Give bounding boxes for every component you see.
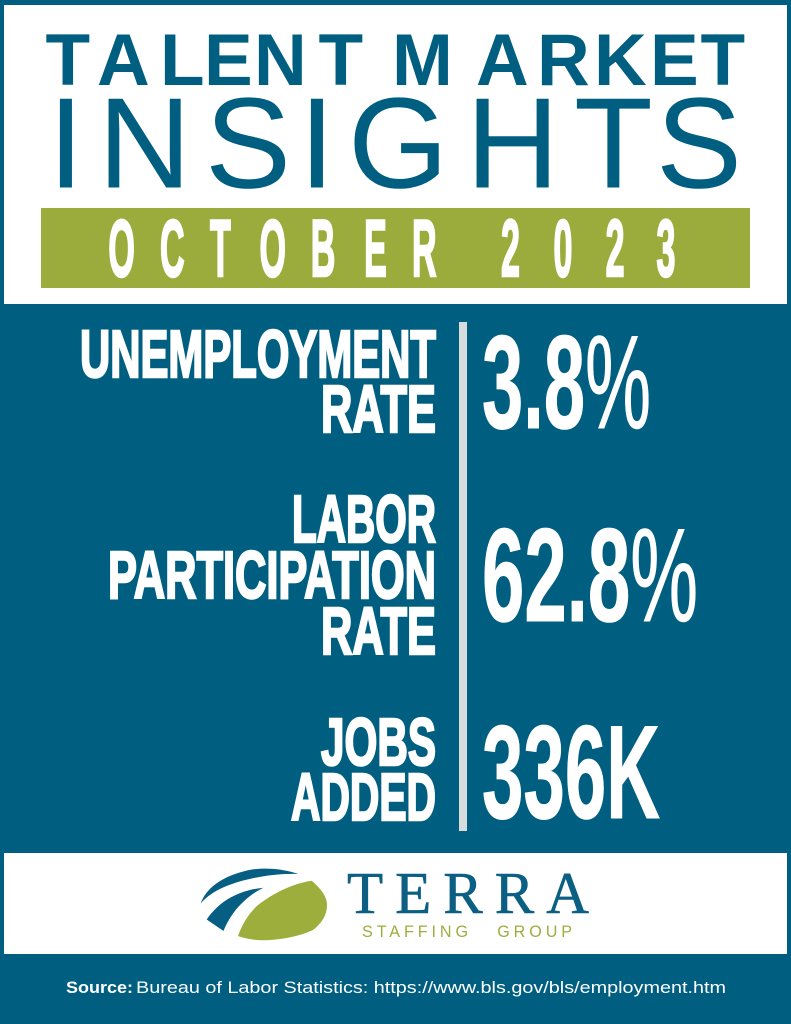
company tagline: STAFFING GROUP	[362, 923, 576, 941]
title line two: INSIGHTS	[48, 72, 742, 216]
label	[80, 317, 436, 447]
source line: Source:	[66, 978, 133, 997]
stat: labor participation rate	[108, 482, 698, 669]
date banner	[41, 204, 750, 294]
label: ADDED	[291, 760, 436, 835]
header panel	[4, 5, 787, 304]
label: LABOR	[292, 482, 436, 557]
logo mark	[201, 869, 327, 940]
label: RATE	[321, 594, 436, 669]
stat: unemployment rate	[80, 309, 651, 457]
divider	[459, 322, 467, 831]
label: UNEMPLOYMENT	[80, 317, 436, 392]
title line one: TALENT MARKET	[46, 20, 745, 101]
logo panel	[4, 853, 787, 954]
date text: OCTOBER 2023	[108, 204, 675, 294]
label	[108, 482, 436, 669]
label	[291, 705, 436, 835]
label: PARTICIPATION	[108, 538, 436, 613]
value: 3.8%	[482, 309, 651, 457]
label: JOBS	[321, 705, 436, 780]
label: RATE	[321, 372, 436, 447]
source line: Bureau of Labor Statistics: https://www.bls.gov/bls/employment.htm	[136, 978, 726, 997]
stat: jobs added	[291, 699, 660, 847]
value: 62.8%	[482, 502, 698, 650]
company name: TERRA	[347, 860, 601, 926]
value: 336K	[482, 699, 660, 847]
